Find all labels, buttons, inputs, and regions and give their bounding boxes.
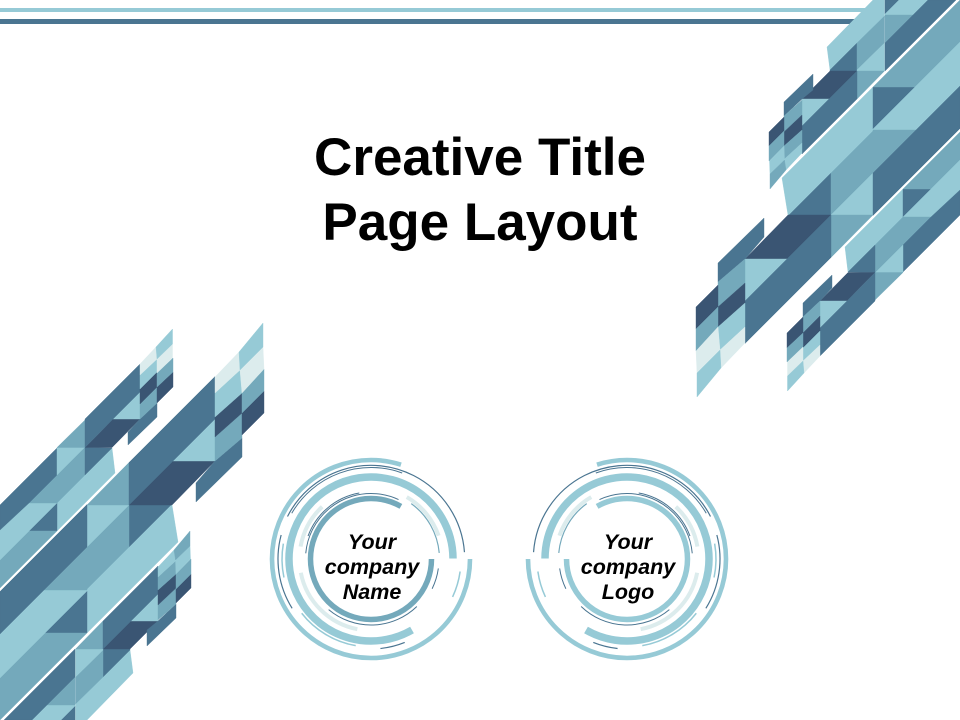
geometric cluster: bottom left bbox=[0, 323, 264, 720]
badge text bbox=[581, 530, 676, 604]
badge text: Name bbox=[343, 580, 401, 604]
badge text: company bbox=[325, 555, 420, 579]
title: Page Layout bbox=[322, 193, 638, 252]
top rule: light band bbox=[0, 8, 866, 12]
badge text: company bbox=[581, 555, 676, 579]
badge text: Your bbox=[348, 530, 398, 554]
title bbox=[314, 128, 646, 252]
badge text: Your bbox=[604, 530, 654, 554]
title: Creative Title bbox=[314, 128, 646, 187]
concentric ring arcs bbox=[243, 431, 499, 687]
badge text bbox=[325, 530, 420, 604]
badge: your company logo bbox=[499, 431, 755, 687]
geometric cluster: top right bbox=[696, 0, 960, 397]
badge text: Logo bbox=[602, 580, 654, 604]
concentric ring arcs mirrored bbox=[499, 431, 755, 687]
badge: your company name bbox=[243, 431, 499, 687]
top rule: dark band bbox=[0, 19, 856, 24]
